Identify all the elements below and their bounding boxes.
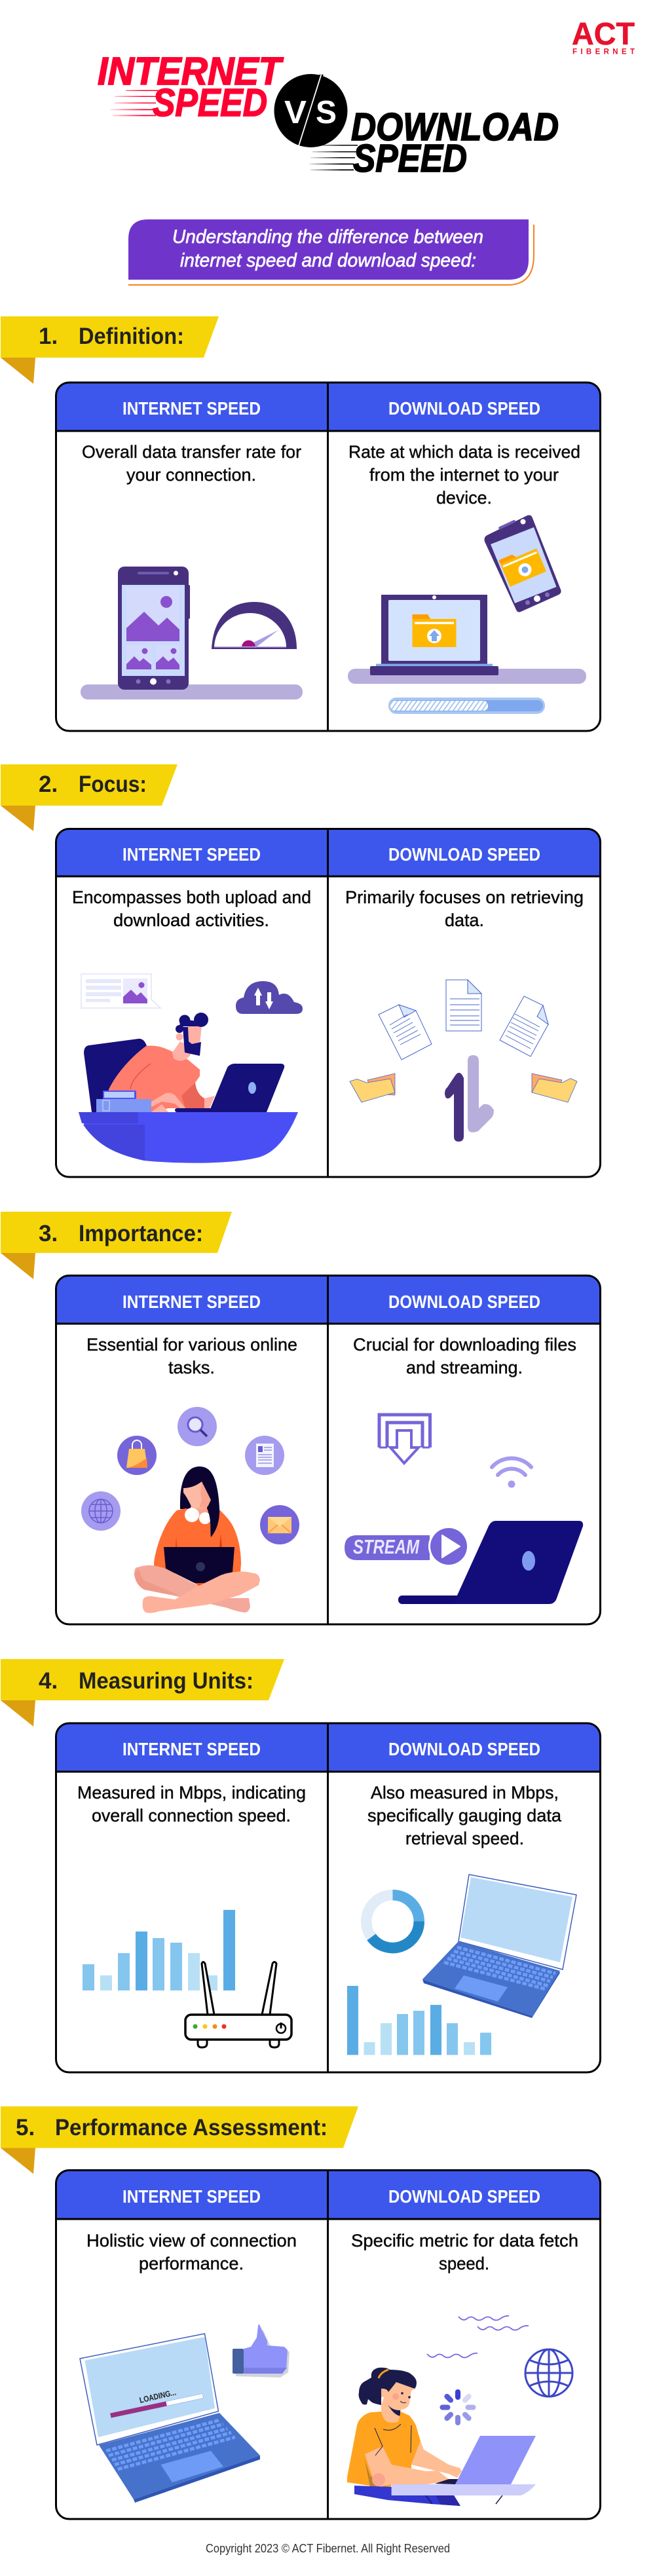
title text: download speed <box>351 105 559 180</box>
table header: DOWNLOAD SPEED <box>388 844 540 865</box>
panel: measuring units <box>56 1723 600 2072</box>
text: download speed definition: from the internet to your <box>369 465 559 485</box>
panel: importance <box>56 1276 600 1624</box>
section heading: 2. Focus <box>1 764 178 831</box>
text: internet speed units <box>77 1783 306 1825</box>
stream button <box>345 1526 469 1567</box>
subtitle banner: Understanding the difference between <box>172 227 483 248</box>
table header <box>56 1723 600 1772</box>
section heading: 5. Performance Assessment: 5. <box>16 2115 35 2140</box>
donut chart <box>366 1895 419 1948</box>
icon: router <box>185 1962 291 2047</box>
icon: mail <box>260 1505 299 1544</box>
man <box>107 1013 215 1112</box>
table header: INTERNET SPEED <box>122 398 261 419</box>
text: download speed units <box>367 1783 562 1848</box>
section heading: 3. Importance <box>1 1212 232 1279</box>
text: internet speed importance <box>86 1335 297 1377</box>
section heading: 3. Importance: 3. <box>39 1221 58 1246</box>
subtitle banner: internet speed and download speed: <box>180 250 476 271</box>
text: download speed performance: Specific metric for data fetch <box>351 2231 578 2250</box>
subtitle banner <box>128 219 534 285</box>
section heading: 1. Definition <box>1 316 219 384</box>
text: internet speed definition: your connection. <box>126 465 256 485</box>
text: internet speed importance: tasks. <box>168 1358 215 1377</box>
icon: globe <box>525 2349 572 2397</box>
transfer arrows <box>445 1055 494 1142</box>
title: Internet Speed vs Download Speed <box>98 50 559 180</box>
waves <box>427 2316 529 2358</box>
browser card <box>81 974 160 1008</box>
laptop <box>175 1064 284 1112</box>
section heading: 5. Performance Assessment <box>1 2106 358 2174</box>
section heading: 1. Definition: 1. <box>39 324 58 349</box>
text: download speed definition: device. <box>436 488 492 508</box>
chair <box>84 1039 147 1112</box>
laptop <box>398 1521 583 1604</box>
text: internet speed definition: Overall data transfer rate for <box>82 442 301 462</box>
text: download speed definition: Rate at which data is received <box>348 442 580 462</box>
text: download speed focus: Primarily focuses on retrieving <box>345 887 584 907</box>
text: download speed importance: Crucial for downloading files <box>353 1335 576 1354</box>
table header <box>56 1276 600 1324</box>
icon: download arrow <box>379 1415 430 1463</box>
vs badge: V <box>284 95 307 130</box>
title text: download speed: DOWNLOAD <box>351 105 559 149</box>
text: download speed importance: and streaming. <box>406 1358 523 1377</box>
section heading: 5. Performance Assessment: Performance Assessment: <box>55 2115 328 2140</box>
icon: search <box>178 1407 217 1446</box>
desk <box>79 1112 298 1163</box>
text: download speed focus: data. <box>445 910 484 930</box>
table header: DOWNLOAD SPEED <box>388 1292 540 1312</box>
table header <box>56 829 600 876</box>
text: download speed units: Also measured in Mbps, <box>371 1783 559 1802</box>
text: internet speed focus <box>72 887 311 930</box>
table header: DOWNLOAD SPEED <box>388 398 540 419</box>
footer: copyright: Copyright 2023 © ACT Fibernet. All Right Reserved <box>206 2542 450 2555</box>
table header: INTERNET SPEED <box>122 1292 261 1312</box>
text: download speed units: retrieval speed. <box>405 1829 524 1848</box>
table header: INTERNET SPEED <box>122 1739 261 1759</box>
text: download speed definition <box>348 442 580 508</box>
folder icons <box>350 1073 577 1102</box>
icon: laptop with keyboard <box>422 1875 576 2018</box>
icon: laptop, phone and progress bar <box>348 515 586 714</box>
table header <box>56 383 600 431</box>
text: internet speed units: Measured in Mbps, indicating <box>77 1783 306 1802</box>
bar chart: right <box>347 1986 491 2055</box>
icon: globe <box>81 1491 121 1531</box>
bar chart: left <box>83 1910 235 1990</box>
table header: INTERNET SPEED <box>122 2186 261 2207</box>
title text: download speed: SPEED <box>353 137 467 180</box>
text: internet speed performance: performance. <box>139 2254 244 2273</box>
illustration: files and transfer arrows <box>350 980 577 1142</box>
text: download speed importance <box>353 1335 576 1377</box>
text: internet speed focus: download activities. <box>113 910 269 930</box>
books <box>96 1091 151 1112</box>
section heading: 3. Importance: Importance: <box>79 1221 203 1246</box>
title text: internet speed: SPEED <box>153 81 267 124</box>
logo: ACT Fibernet: FIBERNET <box>572 48 635 56</box>
text: download speed focus <box>345 887 584 930</box>
illustration: woman on laptop <box>347 2316 572 2506</box>
text: internet speed units: overall connection speed. <box>92 1806 291 1825</box>
text: internet speed focus: Encompasses both upload and <box>72 887 311 907</box>
illustration: man working at laptop <box>79 974 303 1163</box>
section heading: 4. Measuring Units: 4. <box>39 1668 58 1694</box>
table header <box>56 2171 600 2219</box>
panel: performance assessment <box>56 2171 600 2519</box>
icon: news document <box>245 1436 284 1475</box>
panel: definition <box>56 383 600 731</box>
logo: ACT Fibernet: ACT <box>572 17 635 52</box>
text: download speed performance <box>351 2231 578 2273</box>
section heading: 4. Measuring Units <box>1 1659 284 1727</box>
woman <box>347 2368 536 2506</box>
table header: INTERNET SPEED <box>122 844 261 865</box>
text: internet speed definition <box>82 442 301 485</box>
file icons <box>379 980 548 1060</box>
title text: internet speed: INTERNET <box>98 50 284 93</box>
loading spinner <box>440 2389 476 2425</box>
section heading: 4. Measuring Units: Measuring Units: <box>79 1668 253 1694</box>
table header: DOWNLOAD SPEED <box>388 2186 540 2207</box>
woman <box>134 1466 260 1613</box>
panel: focus <box>56 829 600 1177</box>
table header: DOWNLOAD SPEED <box>388 1739 540 1759</box>
illustration: loading laptop <box>80 2334 260 2503</box>
illustration: woman with online task icons <box>81 1407 299 1613</box>
illustration: streaming and download <box>345 1415 583 1604</box>
section heading: 2. Focus: 2. <box>39 772 58 797</box>
text: download speed performance: speed. <box>439 2254 489 2273</box>
icon: phone and speed gauge <box>81 567 303 700</box>
speed lines: red <box>110 90 159 116</box>
cloud icon <box>236 981 303 1014</box>
icon: shopping bag <box>117 1436 157 1475</box>
text: download speed units: specifically gauging data <box>367 1806 562 1825</box>
vs badge: S <box>316 95 337 130</box>
icon: wifi <box>492 1458 531 1488</box>
speed lines: black <box>309 145 358 170</box>
text: internet speed performance: Holistic view of connection <box>86 2231 297 2250</box>
text: internet speed importance: Essential for various online <box>86 1335 297 1354</box>
vs badge <box>274 73 347 148</box>
title text: internet speed <box>98 50 284 124</box>
section heading: 1. Definition: Definition: <box>79 324 184 349</box>
loading text: LOADING... <box>139 2387 177 2405</box>
section heading: 2. Focus: Focus: <box>79 772 147 797</box>
icon: thumbs up <box>233 2324 290 2378</box>
progress bar <box>110 2394 204 2417</box>
text: internet speed performance <box>86 2231 297 2273</box>
stream button: STREAM <box>353 1535 420 1558</box>
